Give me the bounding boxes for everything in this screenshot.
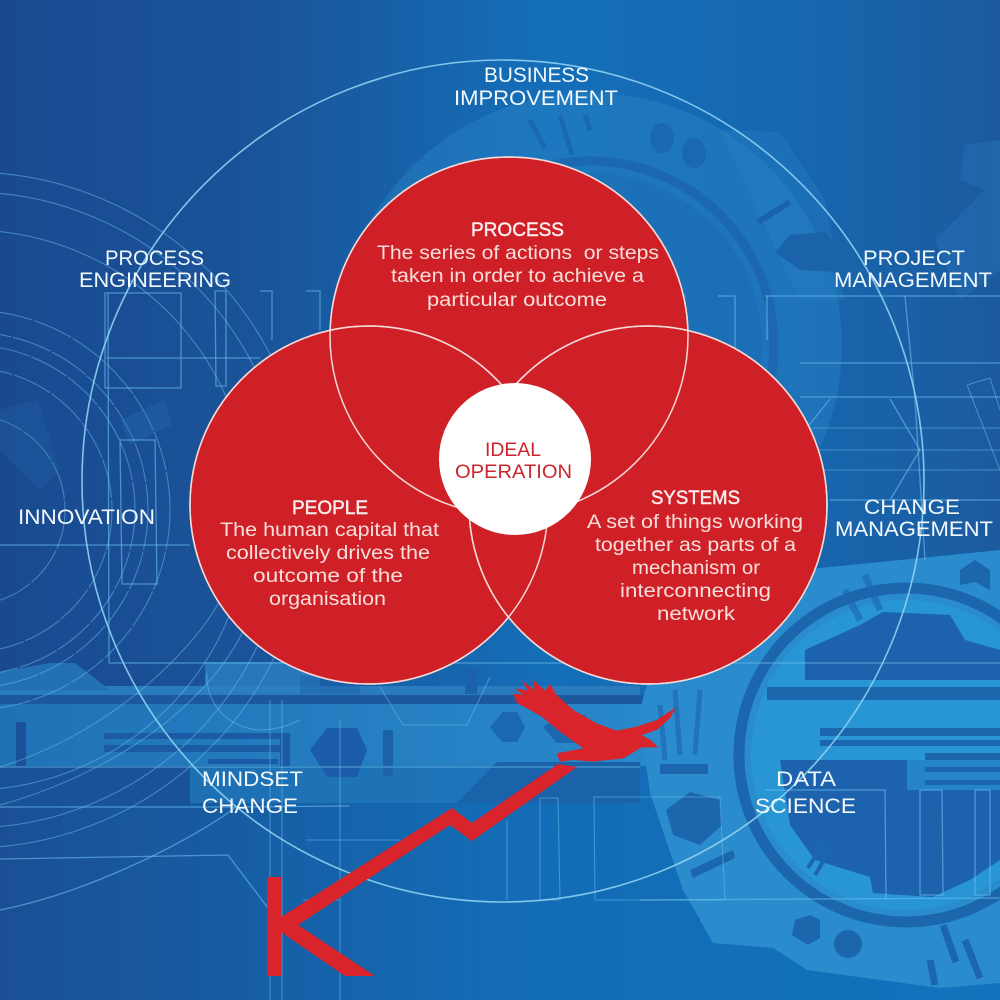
label: change management <box>835 496 993 541</box>
gear inner dark lower <box>780 760 1000 897</box>
text: systems <box>587 488 803 625</box>
text: systems: interconnecting <box>620 581 771 602</box>
logo letter K and zigzag line <box>267 764 577 976</box>
text: systems: A set of things working <box>587 512 803 533</box>
text: people: The human capital that <box>220 520 440 541</box>
circle: people <box>190 326 548 684</box>
outer ring <box>82 60 924 902</box>
lower right gear <box>640 550 1000 988</box>
label: project management: PROJECT <box>863 247 965 270</box>
venn diagram <box>190 157 827 684</box>
text: systems: mechanism or <box>632 558 761 579</box>
label: process engineering: PROCESS <box>105 247 204 270</box>
text: process: taken in order to achieve a <box>391 266 644 287</box>
label: data science: DATA <box>776 768 836 791</box>
label: business improvement <box>454 64 618 110</box>
label: mindset change <box>202 768 303 818</box>
text: people <box>220 498 440 610</box>
label: process engineering <box>79 247 231 292</box>
text: people: outcome of the <box>253 566 403 587</box>
label: project management <box>834 247 992 292</box>
surrounding discipline labels <box>18 64 993 818</box>
text: process: The series of actions or steps <box>377 243 659 264</box>
label: innovation: INNOVATION <box>18 506 155 529</box>
label: data science <box>755 768 856 818</box>
label: mindset change: CHANGE <box>202 795 298 818</box>
lower horizontal circuit band <box>0 662 1000 805</box>
eagle <box>513 679 676 762</box>
label: process engineering: ENGINEERING <box>79 269 231 292</box>
centre circle: ideal operation: OPERATION <box>455 462 572 483</box>
text: people: organisation <box>269 589 386 610</box>
centre circle: ideal operation <box>439 383 591 535</box>
label: change management: CHANGE <box>864 496 960 519</box>
circle: process <box>330 157 688 515</box>
text: people: PEOPLE <box>292 498 368 519</box>
gear inner dark upper <box>805 612 1000 680</box>
text: process: PROCESS <box>471 220 564 241</box>
text: people: collectively drives the <box>226 543 430 564</box>
text: systems: together as parts of a <box>595 535 796 556</box>
overlap outlines <box>190 157 827 684</box>
left concentric arcs <box>0 172 308 848</box>
blueprint outlines <box>0 291 1000 1000</box>
label: mindset change: MINDSET <box>202 768 303 791</box>
label: data science: SCIENCE <box>755 795 856 818</box>
label: project management: MANAGEMENT <box>834 269 992 292</box>
text: systems: network <box>657 604 736 625</box>
upper right gear fragment <box>935 140 1000 300</box>
label: business improvement: IMPROVEMENT <box>454 87 618 110</box>
circle: systems <box>469 326 827 684</box>
label: change management: MANAGEMENT <box>835 518 993 541</box>
text: process <box>377 220 659 311</box>
label: business improvement: BUSINESS <box>484 64 589 87</box>
logo: K with rising arrow and eagle <box>267 679 676 976</box>
text: systems: SYSTEMS <box>651 488 740 509</box>
text: process: particular outcome <box>427 290 607 311</box>
upper gear <box>338 93 850 597</box>
centre circle: ideal operation: IDEAL <box>485 440 541 461</box>
